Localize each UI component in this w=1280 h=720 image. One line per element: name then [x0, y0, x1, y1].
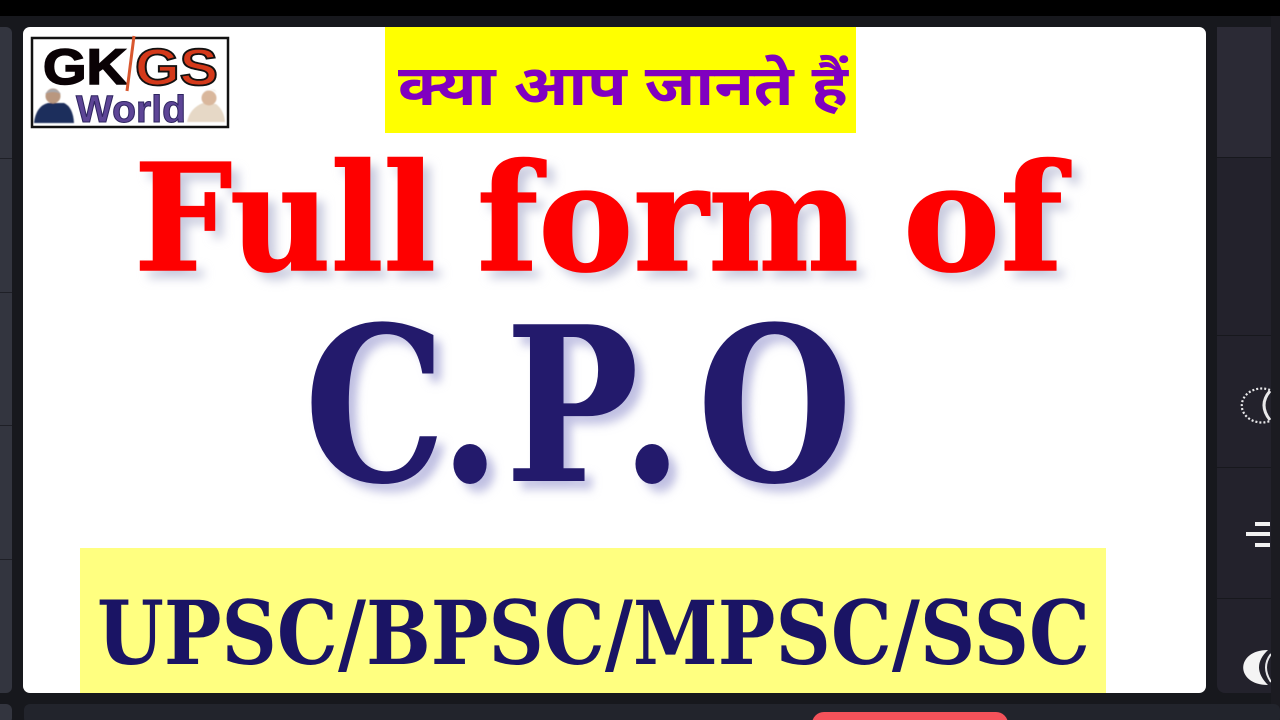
icon: alignment lines [1246, 522, 1270, 547]
logo text GS: GS [135, 39, 218, 97]
title shadow: Full form of [142, 139, 1079, 313]
pale yellow exam band [80, 548, 1106, 693]
title: Full form of: form [477, 131, 859, 305]
exam list text: UPSC/BPSC/MPSC/SSC [97, 581, 1090, 685]
title shadow: Full form of: Full [142, 139, 444, 313]
title shadow: Full form of: of [911, 139, 1079, 313]
logo text GK: GK [43, 39, 127, 95]
icon: dotted crescent [1242, 388, 1270, 422]
right toolbar panel [1217, 16, 1280, 720]
Hindi heading: क्या आप जानते हैं [398, 54, 849, 117]
icon: filled crescent [1243, 650, 1271, 685]
acronym: C.P.O: C.P.O [304, 279, 852, 532]
logo portrait right [187, 89, 225, 122]
bottom toolbar [0, 704, 1280, 720]
left side panel [0, 27, 12, 693]
yellow banner [385, 27, 856, 133]
logo text World: World [76, 89, 186, 131]
logo portrait left [34, 88, 74, 123]
logo: GK/GS World [32, 36, 228, 131]
title: Full form of [134, 131, 1071, 305]
title shadow: Full form of: form [485, 139, 867, 313]
title: Full form of: Full [134, 131, 436, 305]
acronym shadow: C.P.O: C.P.O [312, 287, 860, 540]
logo slash [127, 36, 134, 91]
title: Full form of: of [903, 131, 1071, 305]
red button [812, 712, 1008, 720]
